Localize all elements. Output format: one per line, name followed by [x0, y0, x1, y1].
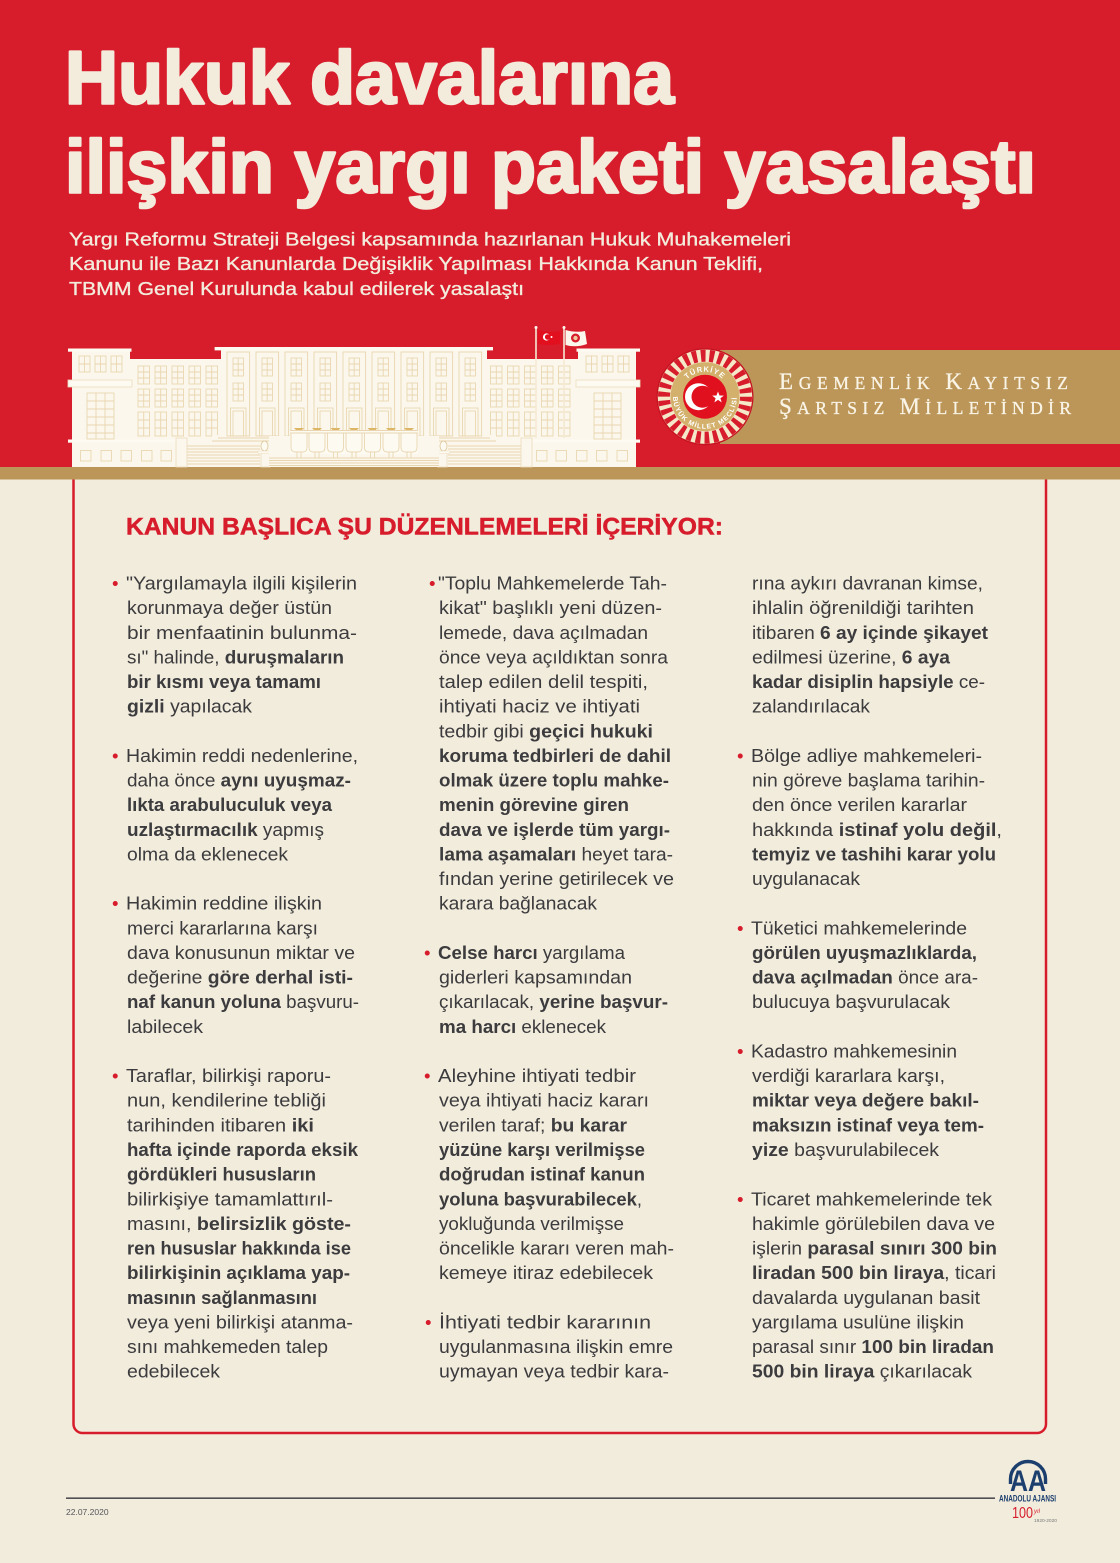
subtitle: Kanunu ile Bazı Kanunlarda Değişiklik Yapılması Hakkında Kanun Teklifi, [69, 253, 763, 274]
item: toplu mahkemeler: kikat" başlıklı yeni düzen- [439, 597, 662, 618]
column 2 [424, 572, 674, 1382]
item: bilirkişi raporu: gördükleri hususların [127, 1164, 316, 1185]
item: merci kararları: • [112, 893, 119, 914]
item: ihtiyati tedbir itiraz: yüzüne karşı verilmişse [439, 1139, 645, 1160]
icon: parliament seal: BÜYÜK MİLLET MECLİSİ [672, 396, 737, 429]
item: gizli duruşma: sı" halinde, duruşmaların [127, 646, 344, 667]
item: bilirkişi raporu: masını, belirsizlik göste- [127, 1213, 351, 1234]
heading: KANUN BAŞLICA ŞU DÜZENLEMELERİ İÇERİYOR: [126, 514, 723, 540]
item: tüketici mahkemeleri: bulucuya başvurulacak [752, 991, 951, 1012]
item: gizli duruşma: bir kısmı veya tamamı [127, 671, 321, 692]
item: ticaret mahkemeleri: liradan 500 bin liraya , ticari [752, 1262, 996, 1283]
item: bilirkişi raporu: Taraflar, bilirkişi raporu- [126, 1065, 331, 1086]
title: ilişkin yargı paketi yasalaştı [65, 124, 1036, 208]
item: celse harcı [424, 942, 668, 1037]
item: tüketici mahkemeleri: görülen uyuşmazlıklarda, [752, 942, 977, 963]
item: ihtiyati tedbir itiraz: öncelikle kararı veren mah- [439, 1238, 674, 1258]
item: gizli duruşma: "Yargılamayla ilgili kişilerin [126, 572, 357, 594]
item: ticaret mahkemeleri: • [737, 1188, 744, 1209]
item: bilirkişi raporu: bilirkişinin açıklama yap- [127, 1262, 350, 1283]
logo: Anadolu Ajansı: AA [1010, 1465, 1046, 1498]
item: ticaret mahkemeleri: 500 bin liraya çıkarılacak [752, 1361, 973, 1382]
item: merci kararları: labilecek [127, 1016, 204, 1037]
item: merci kararları: değerine göre derhal isti- [127, 967, 353, 988]
item: bilirkişi raporu: nun, kendilerine tebliği [127, 1090, 326, 1111]
logo: Anadolu Ajansı: 100 [1012, 1505, 1033, 1522]
item: bilirkişi raporu: hafta içinde raporda eksik [127, 1139, 359, 1160]
footer rule [66, 1498, 995, 1499]
item: bilirkişi raporu: edebilecek [127, 1361, 221, 1382]
item: kadastro: • [737, 1040, 744, 1062]
item: emre uymayan: uygulanmasına ilişkin emre [439, 1336, 673, 1357]
item: celse harcı: giderleri kapsamından [439, 967, 632, 988]
date: 22.07.2020 [66, 1507, 109, 1517]
item: toplu mahkemeler: koruma tedbirleri de dahil [439, 745, 671, 766]
motto band [720, 350, 1120, 444]
item: emre uymayan: İhtiyati tedbir kararının [439, 1311, 651, 1332]
item: tüketici mahkemeleri [737, 917, 978, 1012]
item: ihtiyati tedbir itiraz: Aleyhine ihtiyati tedbir [438, 1065, 636, 1086]
item: ihtiyati tedbir itiraz: veya ihtiyati haciz kararı [439, 1090, 649, 1111]
illustration: parliament building [68, 347, 640, 467]
logo: Anadolu Ajansı: yıl [1033, 1509, 1041, 1515]
item: ticaret mahkemeleri: davalarda uygulanan basit [752, 1287, 981, 1308]
column 1 [112, 572, 359, 1382]
item: bölge adliye: nin göreve başlama tarihin- [752, 770, 985, 790]
item: toplu mahkemeler: "Toplu Mahkemelerde Tah- [438, 572, 667, 594]
item: bölge adliye: • [737, 745, 744, 766]
item: toplu mahkemeler: ihtiyati haciz ve ihtiyati [439, 696, 640, 717]
item: ticaret mahkemeleri [737, 1188, 997, 1382]
item: gizli duruşma: korunmaya değer üstün [127, 597, 332, 618]
motto band: E GEMENLİK K AYITSIZ [779, 369, 1068, 394]
item: toplu mahkemeler: • [429, 572, 436, 594]
item: toplu mahkemeler: lemede, dava açılmadan [439, 622, 648, 643]
item: ihtiyati tedbir itiraz: kemeye itiraz edebilecek [439, 1262, 654, 1283]
item: tüketici mahkemeleri: Tüketici mahkemelerinde [751, 917, 967, 938]
item: emre uymayan [425, 1311, 673, 1382]
item: ticaret mahkemeleri: yargılama usulüne ilişkin [752, 1311, 964, 1332]
item: celse harcı: Celse harcı yargılama [438, 942, 626, 963]
item: ihtiyati tedbir itiraz: doğrudan istinaf kanun [439, 1164, 645, 1185]
item: celse harcı: ma harcı eklenecek [439, 1016, 607, 1037]
item: gizli duruşma: • [112, 572, 119, 594]
item: hakimin reddi: lıkta arabuluculuk veya [127, 794, 333, 815]
item: ihtiyati tedbir itiraz: verilen taraf; bu karar [439, 1114, 627, 1135]
item: hakimin reddi: uzlaştırmacılık yapmış [127, 819, 324, 840]
item: ticaret mahkemeleri: işlerin parasal sınırı 300 bin [752, 1238, 997, 1258]
item: kadastro: yize başvurulabilecek [752, 1139, 940, 1160]
logo: Anadolu Ajansı: 1920-2020 [1034, 1518, 1057, 1524]
item: hakimin reddi: • [112, 745, 119, 766]
item: kadastro [737, 1040, 984, 1160]
item: emre uymayan: • [425, 1311, 432, 1332]
column 3 [737, 572, 1002, 1382]
item: disiplin hapsi: kadar disiplin hapsiyle ce- [752, 671, 985, 692]
item: bilirkişi raporu: ren hususlar hakkında ise [127, 1238, 351, 1258]
subtitle [69, 228, 791, 299]
item: hakimin reddi: daha önce aynı uyuşmaz- [127, 770, 351, 790]
item: hakimin reddi [112, 745, 358, 864]
item: bilirkişi raporu: • [112, 1065, 119, 1086]
item: toplu mahkemeler: lama aşamaları heyet tara- [439, 843, 673, 864]
item: bölge adliye: hakkında istinaf yolu değil , [752, 819, 1002, 840]
item: toplu mahkemeler: önce veya açıldıktan sonra [439, 646, 669, 667]
item: toplu mahkemeler: olmak üzere toplu mahke- [439, 770, 669, 790]
item: tüketici mahkemeleri: dava açılmadan önce ara- [752, 967, 978, 988]
item: ticaret mahkemeleri: parasal sınır 100 bin liradan [752, 1336, 994, 1357]
item: disiplin hapsi: rına aykırı davranan kimse, [752, 572, 983, 594]
item: ticaret mahkemeleri: hakimle görülebilen dava ve [752, 1213, 995, 1234]
icon: parliament seal [656, 348, 754, 446]
item: hakimin reddi: olma da eklenecek [127, 843, 289, 864]
item: ihtiyati tedbir itiraz: yoluna başvurabilecek, [439, 1188, 642, 1209]
title: Hukuk davalarına [65, 36, 675, 120]
title [65, 36, 1036, 208]
icon: parliament seal: TÜRKİYE [684, 366, 726, 378]
item: gizli duruşma: bir menfaatinin bulunma- [127, 622, 357, 643]
subtitle: TBMM Genel Kurulunda kabul edilerek yasalaştı [69, 278, 524, 299]
item: celse harcı: çıkarılacak, yerine başvur- [439, 991, 668, 1012]
item: merci kararları: merci kararlarına karşı [127, 917, 318, 938]
item: celse harcı: • [424, 942, 431, 963]
item: toplu mahkemeler: dava ve işlerde tüm yargı- [439, 819, 670, 840]
item: toplu mahkemeler: talep edilen delil tespiti, [439, 671, 648, 692]
item: bölge adliye: uygulanacak [752, 868, 861, 889]
item: disiplin hapsi [752, 572, 988, 717]
item: gizli duruşma [112, 572, 357, 717]
item: kadastro: maksızın istinaf veya tem- [752, 1114, 984, 1135]
logo: Anadolu Ajansı [999, 1462, 1057, 1524]
item: kadastro: Kadastro mahkemesinin [751, 1040, 957, 1062]
item: toplu mahkemeler: menin görevine giren [439, 794, 629, 815]
item: bilirkişi raporu: masının sağlanmasını [127, 1287, 317, 1308]
flags [534, 326, 587, 438]
item: toplu mahkemeler: fından yerine getirilecek ve [439, 868, 674, 889]
item: toplu mahkemeler [429, 572, 674, 914]
header panel [0, 0, 1120, 480]
item: disiplin hapsi: edilmesi üzerine, 6 aya [752, 646, 951, 667]
item: toplu mahkemeler: tedbir gibi geçici hukuki [439, 720, 653, 741]
item: merci kararları: naf kanun yoluna başvuru- [127, 991, 359, 1012]
content panel frame [74, 480, 1046, 1433]
item: ticaret mahkemeleri: Ticaret mahkemelerinde tek [751, 1188, 993, 1209]
item: bilirkişi raporu: tarihinden itibaren iki [127, 1114, 314, 1135]
item: emre uymayan: uymayan veya tedbir kara- [439, 1361, 669, 1382]
item: bölge adliye: Bölge adliye mahkemeleri- [751, 745, 982, 766]
item: disiplin hapsi: ihlalin öğrenildiği tarihten [752, 597, 974, 618]
item: bilirkişi raporu: bilirkişiye tamamlattırıl- [127, 1188, 333, 1209]
logo: Anadolu Ajansı: ANADOLU AJANSI [999, 1494, 1056, 1504]
item: toplu mahkemeler: karara bağlanacak [439, 893, 598, 914]
item: gizli duruşma: gizli yapılacak [127, 696, 253, 717]
item: tüketici mahkemeleri: • [737, 917, 744, 938]
item: ihtiyati tedbir itiraz [424, 1065, 674, 1283]
motto band: Ş ARTSIZ M İLLETİNDİR [779, 394, 1071, 419]
item: merci kararları: Hakimin reddine ilişkin [126, 893, 322, 914]
item: ihtiyati tedbir itiraz: yokluğunda verilmişse [439, 1213, 624, 1234]
item: bilirkişi raporu [112, 1065, 359, 1382]
item: ihtiyati tedbir itiraz: • [424, 1065, 431, 1086]
item: merci kararları [112, 893, 359, 1037]
subtitle: Yargı Reformu Strateji Belgesi kapsamında hazırlanan Hukuk Muhakemeleri [69, 228, 791, 250]
item: disiplin hapsi: zalandırılacak [752, 696, 871, 717]
item: bölge adliye [737, 745, 1002, 889]
item: kadastro: miktar veya değere bakıl- [752, 1090, 979, 1111]
item: merci kararları: dava konusunun miktar ve [127, 942, 355, 963]
item: bölge adliye: temyiz ve tashihi karar yolu [752, 843, 996, 864]
item: bilirkişi raporu: veya yeni bilirkişi atanma- [127, 1311, 353, 1332]
item: bölge adliye: den önce verilen kararlar [752, 794, 967, 815]
item: kadastro: verdiği kararlara karşı, [752, 1065, 945, 1086]
item: hakimin reddi: Hakimin reddi nedenlerine, [126, 745, 358, 766]
item: disiplin hapsi: itibaren 6 ay içinde şikayet [752, 622, 988, 643]
item: bilirkişi raporu: sını mahkemeden talep [127, 1336, 328, 1357]
